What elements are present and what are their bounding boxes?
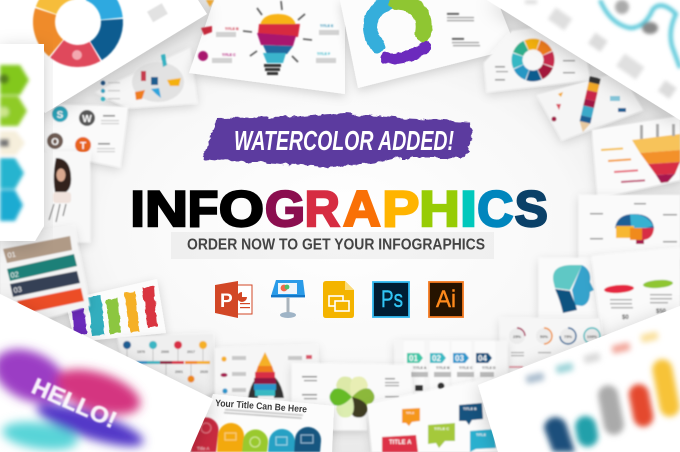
card: your title bbox=[191, 394, 334, 452]
card: puzzle brain bbox=[579, 195, 680, 259]
hello text: HELLO! bbox=[28, 373, 121, 433]
bubble: cyan bbox=[470, 429, 496, 452]
card: portrait bbox=[42, 152, 90, 242]
icon: letter W: W bbox=[82, 114, 92, 125]
bubble: orange bbox=[402, 408, 420, 426]
card: pricing bbox=[592, 248, 680, 335]
icon: rocket bbox=[248, 352, 284, 398]
title: infographics: C bbox=[477, 181, 513, 237]
card: percent rings: 75% bbox=[564, 334, 572, 339]
card: timeline: 2020 bbox=[200, 370, 208, 374]
card: watercolor columns bbox=[65, 279, 166, 342]
card: numbered steps: TITLE B bbox=[436, 366, 450, 370]
card: speech bubbles bbox=[367, 378, 510, 452]
title: infographics: I bbox=[131, 181, 145, 237]
card: numbered steps: TITLE A bbox=[413, 366, 427, 370]
title: infographics: O bbox=[219, 181, 264, 237]
pills row: Title A bbox=[197, 446, 209, 451]
subtitle band: ORDER NOW TO GET YOUR INFOGRAPHICS bbox=[187, 236, 485, 254]
labels and mini icons: TITLE C bbox=[222, 53, 236, 57]
card: numbered steps bbox=[395, 341, 507, 403]
banner: watercolor added: WATERCOLOR ADDED! bbox=[234, 125, 454, 156]
card: watercolor ring bbox=[340, 0, 516, 88]
labels and mini icons bbox=[198, 0, 339, 63]
bubble: navy: TITLE B bbox=[463, 407, 477, 411]
card: ribbons: 03 bbox=[13, 285, 23, 295]
labels and mini icons: TITLE B bbox=[225, 27, 239, 31]
icon: Photoshop: Ps bbox=[381, 286, 403, 313]
chart bars bbox=[525, 331, 680, 452]
labels and mini icons: TITLE F bbox=[317, 52, 331, 56]
pills row bbox=[191, 417, 321, 452]
card: pencil bbox=[537, 72, 643, 140]
card: flower diagram bbox=[292, 363, 412, 430]
card: rocket bbox=[215, 345, 320, 405]
icon: pencil bbox=[577, 76, 601, 133]
title: infographics: R bbox=[305, 181, 340, 237]
bubble: green bbox=[428, 423, 455, 448]
card: ribbons bbox=[0, 226, 90, 320]
card: numbered steps: TITLE C bbox=[459, 366, 473, 370]
bubble: orange: TITLE bbox=[406, 411, 414, 415]
card: ribbons: 02 bbox=[10, 270, 20, 280]
foreground card: blurred cycle chart bbox=[0, 0, 207, 113]
icon: flower bbox=[330, 373, 374, 421]
title: infographics: A bbox=[343, 181, 381, 237]
card: timeline: 2017 bbox=[187, 350, 195, 354]
foreground card: blurred wavy path bbox=[487, 0, 680, 120]
bubble: red title bbox=[382, 435, 418, 452]
card: funnel bbox=[592, 116, 680, 198]
icon: letter O: O bbox=[51, 137, 59, 148]
card: ribbons: 01 bbox=[7, 250, 17, 260]
title: infographics: G bbox=[265, 181, 305, 237]
card: timeline bbox=[117, 334, 215, 398]
step 03: 03 bbox=[455, 354, 464, 363]
card: light bulb bbox=[189, 0, 345, 94]
labels and mini icons: TITLE E bbox=[320, 24, 334, 28]
title: infographics bbox=[131, 181, 548, 237]
icon: Illustrator bbox=[429, 282, 463, 317]
title: infographics: N bbox=[145, 181, 188, 237]
icon: Google Slides bbox=[323, 281, 354, 318]
card: SWOT bbox=[44, 104, 128, 167]
foreground card: blurred bar chart bbox=[478, 306, 680, 452]
timeline bar bbox=[136, 361, 210, 364]
title: infographics: H bbox=[419, 181, 460, 237]
icon: PowerPoint bbox=[215, 281, 252, 318]
banner: watercolor added bbox=[202, 113, 473, 167]
card: colour wheel bbox=[484, 22, 590, 92]
card: percent rings: 100% bbox=[587, 334, 598, 339]
bubble: red title: TITLE A bbox=[389, 440, 412, 446]
icon: PowerPoint: P bbox=[220, 291, 233, 312]
card: percent rings bbox=[500, 318, 606, 376]
card: pricing: $0 bbox=[622, 315, 629, 321]
foreground card: blurred hexagons panel bbox=[0, 44, 44, 241]
title: infographics: F bbox=[188, 181, 218, 237]
icon: letter S: S bbox=[57, 110, 64, 121]
bubble: cyan: TITLE bbox=[476, 433, 487, 437]
icon: bulb bbox=[243, 1, 312, 75]
card: timeline: 2001 bbox=[175, 370, 183, 374]
step 02: 02 bbox=[432, 354, 441, 363]
title: infographics: P bbox=[382, 181, 419, 237]
card: percent rings: 50% bbox=[540, 334, 548, 339]
icon: letter T: T bbox=[80, 141, 86, 152]
step 04: 04 bbox=[478, 354, 487, 363]
card: timeline: 1970 bbox=[137, 350, 145, 354]
icon: Illustrator: Ai bbox=[436, 286, 456, 313]
title: infographics: I bbox=[460, 181, 477, 237]
card: percent rings: 25% bbox=[513, 334, 521, 339]
icon: Photoshop bbox=[373, 282, 409, 317]
card: head diagram bbox=[539, 258, 601, 318]
step 01: 01 bbox=[409, 354, 418, 363]
chart: funnel stages bbox=[632, 124, 680, 183]
foreground card: blurred HELLO watercolor bbox=[0, 294, 213, 452]
icon: Keynote bbox=[271, 280, 305, 318]
card: timeline: 2000 bbox=[161, 350, 169, 354]
text lines bbox=[447, 13, 480, 46]
card: numbered steps: TITLE D bbox=[482, 366, 496, 370]
card: pricing: $50 bbox=[656, 309, 667, 315]
title: infographics: S bbox=[515, 181, 548, 237]
bubble: navy bbox=[459, 403, 483, 425]
heading: your title can be here: Your Title Can Be Here bbox=[215, 398, 307, 415]
bubble: green: TITLE C bbox=[434, 426, 449, 431]
card: Europe map bbox=[95, 48, 197, 108]
subtitle band bbox=[171, 232, 494, 259]
